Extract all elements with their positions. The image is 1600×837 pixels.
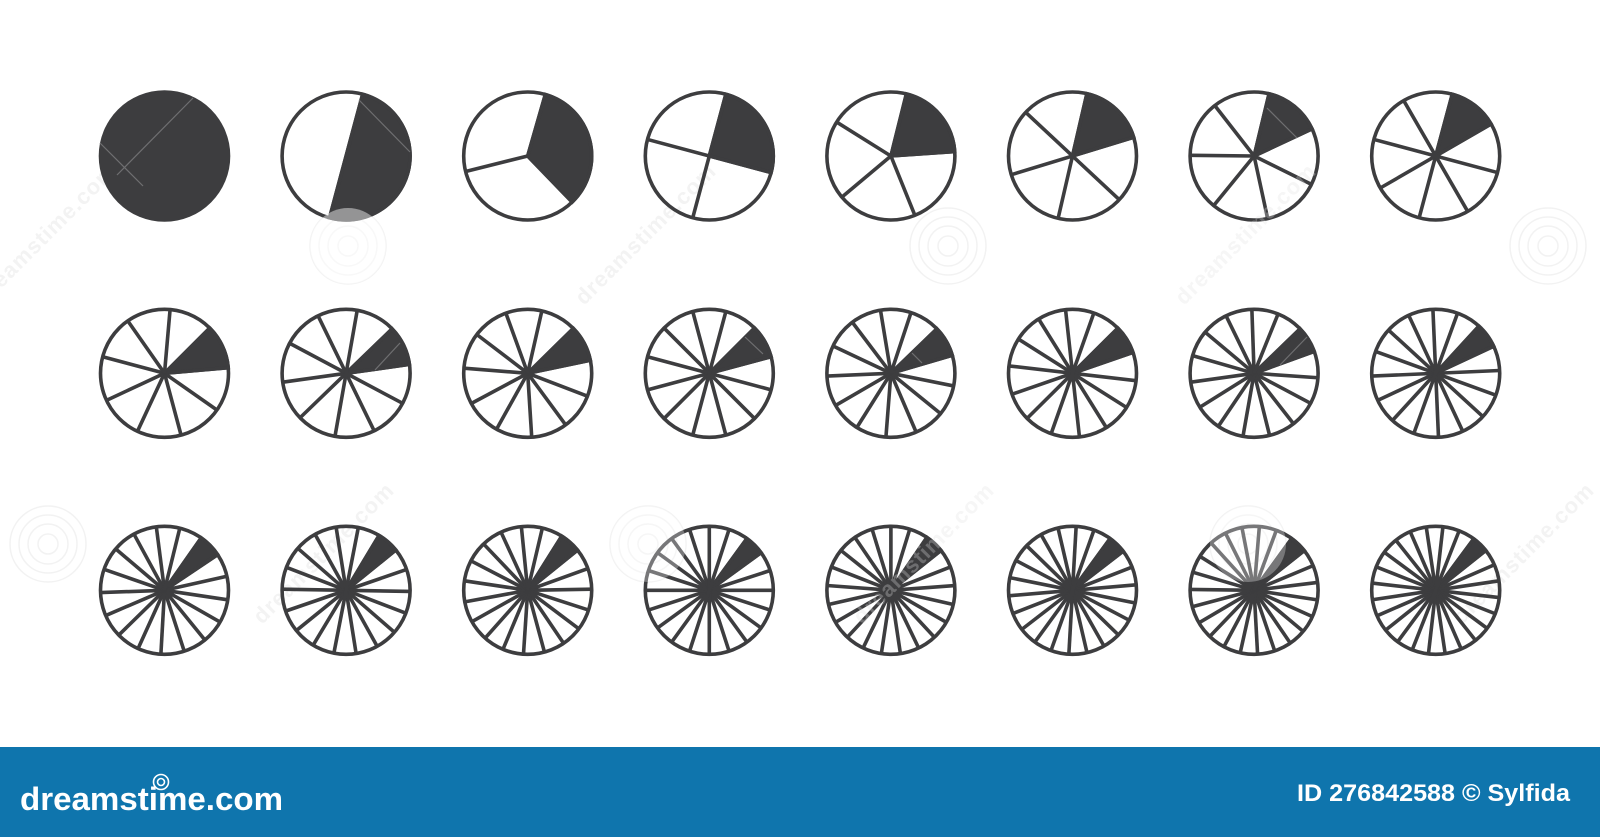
pie: 20 segments [620,501,799,680]
pie: 2 segments [282,92,424,234]
watermark under the charts: dreamstime.com [1170,158,1321,310]
icon: spiral [154,774,168,790]
pie: 24 segments [1346,501,1525,680]
pie: 12 segments [619,283,800,464]
image id and credit: ID 276842588 © Sylfida [1297,780,1570,807]
pie: 17 segments [76,501,253,678]
pie: 19 segments [440,502,616,678]
watermark under the charts [0,158,1599,629]
pie: 18 segments [259,503,433,678]
pie: 9 segments [77,283,254,460]
watermark under the charts: dreamstime.com [570,158,721,310]
pie: 5 segments [819,79,965,221]
row 2: pies with 9 to 16 segments [77,283,1526,464]
row 3: pies with 17 to 24 segments [76,501,1525,680]
watermark over the charts [100,98,1321,629]
pie: 15 segments [1165,283,1344,463]
pie: 14 segments [983,284,1162,463]
logo text: dreamstime.com [20,781,283,817]
pie: 8 segments [1357,78,1514,234]
footer bar [0,747,1600,837]
row 1: pies with 1 to 8 segments [99,78,1514,234]
watermark under the charts: dreamstime.com [848,477,999,629]
watermark under the charts: dreamstime.com [248,477,399,629]
pie: 16 segments [1345,283,1526,464]
pie: 6 segments [1004,81,1141,231]
watermark over the charts: dreamstime.com [848,477,999,629]
pie: 23 segments [1165,501,1343,679]
pie: 4 segments [631,78,788,234]
pie: 22 segments [984,501,1161,679]
pie: 13 segments [802,283,981,462]
pie: 21 segments [803,501,980,679]
watermark over the charts: dreamstime.com [1170,158,1321,310]
pie: 7 segments [1180,79,1330,227]
pie: 11 segments [439,283,618,462]
pie: 10 segments [258,285,434,462]
pie: 3 segments [464,79,607,220]
pie: 1 segment [99,90,230,222]
watermark under the charts: dreamstime.com [1448,477,1599,629]
